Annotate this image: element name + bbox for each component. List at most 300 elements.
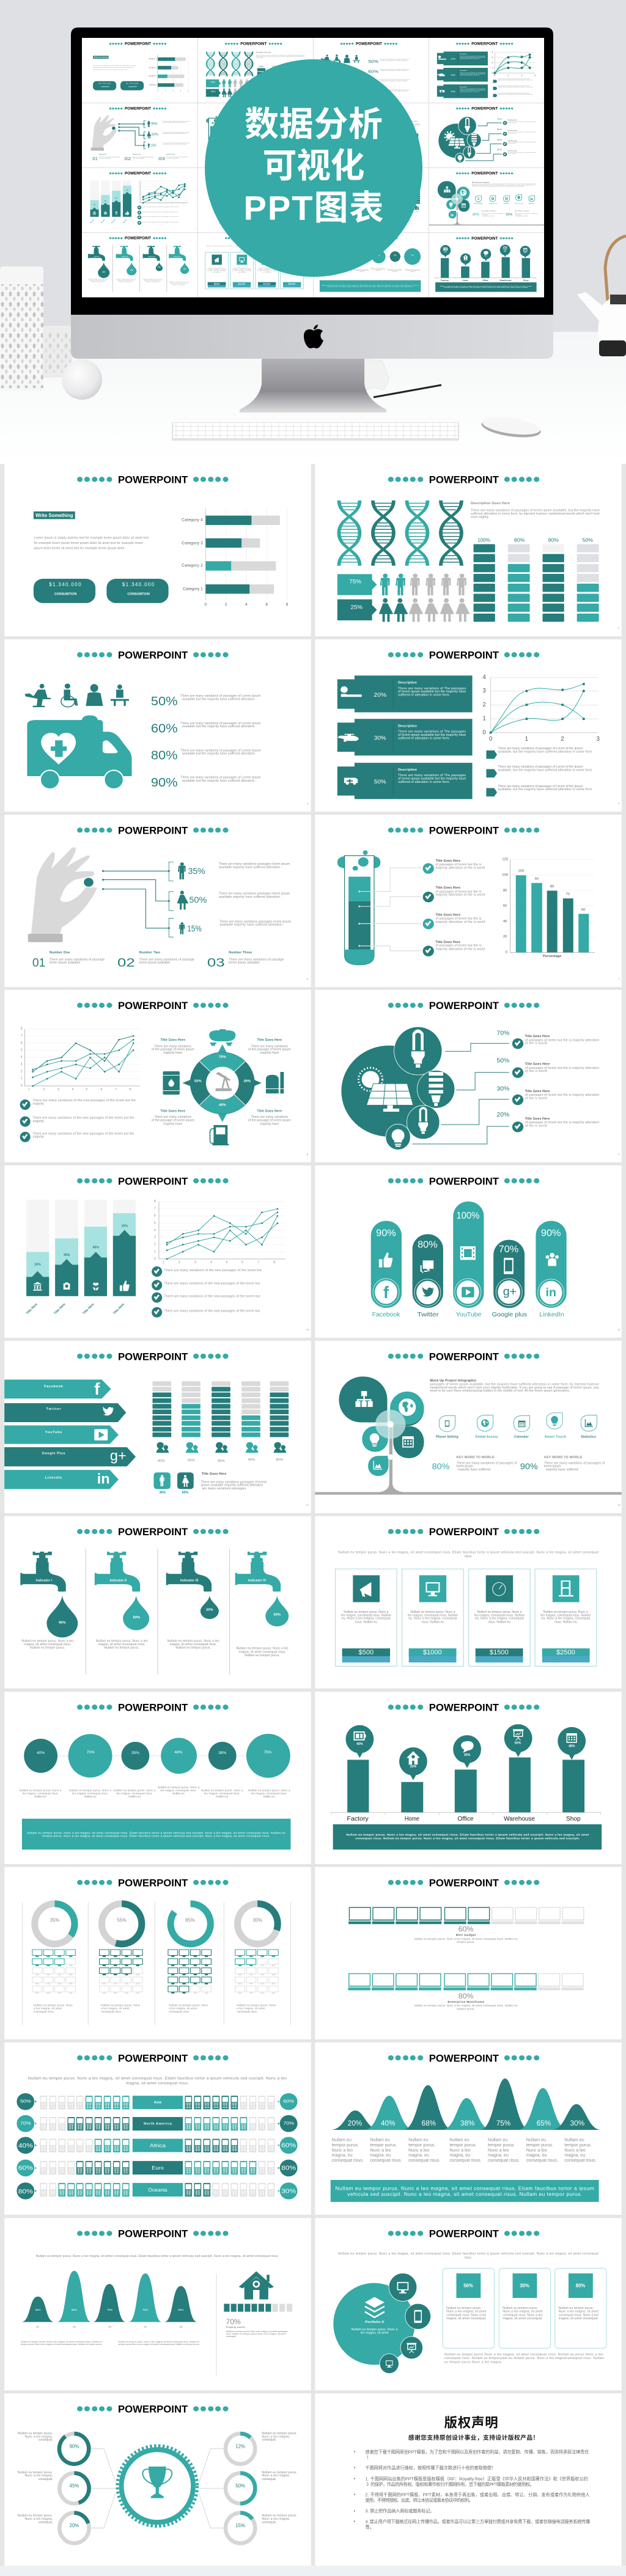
heading: POWERPOINT [429,1351,499,1362]
line chart: 4 [72,1088,73,1092]
bubble captions: leo magna, consequat risus. [117,1792,152,1795]
donut notes: Nullam eu tempor purus. [18,2432,53,2435]
panel: slide 11 social ribbons [4,1341,311,1513]
peak chart: 60% [178,2308,183,2311]
percent list: 60% [151,722,178,735]
hero: iMac desk mockup [0,0,626,464]
line chart: 3 [57,1088,59,1092]
bar chart: 4 [245,603,248,607]
stat card 30: Nunc a leo magna, sit amet [503,2310,543,2314]
price card 1000: eu. Nunc a leo magna, consequat [408,1617,457,1621]
laptop row 60 percent [348,1907,584,1943]
bar chart with pins [331,1724,600,1822]
keyword stats: lorem ipsum [544,1465,561,1469]
peak captions: magna, eu [370,2153,391,2158]
intro text: Lorem Ipsum is simply dummy text for example lorem ipsum dolor sit amet text [34,536,149,540]
mock-up text: need to be sure there embarrassing hidden in the middle of text. All the lorem ipsum generators. [430,1389,570,1393]
price card 2500: $2500 [556,1649,575,1656]
faucet indicator IV: Nullam eu tempor purus. Nunc a leo [237,1647,289,1651]
donut notes [18,2432,297,2524]
faucet indicator II: Nullam eu tempor purus. Nunc a leo [96,1639,148,1643]
check items: majority alteration of the is world [435,866,485,870]
peak chart: 70% [142,2308,148,2311]
stat card 80 [555,2268,606,2348]
connector lines [103,862,174,937]
bubble captions: Nullam eu [34,1795,46,1798]
donut values: 50% [235,2483,245,2489]
keyword stats: 80% [432,1462,449,1471]
line chart: 7 [257,1261,259,1264]
donut notes: Nullam eu tempor purus. [18,2471,53,2475]
facebook ribbon [4,1379,111,1398]
price card 1500: Nullam eu tempor purus. Nunc a [477,1610,522,1614]
youtube pill [453,1202,484,1308]
bullets: • [354,2449,356,2454]
property progress: Nullam eu tempor purus. Nunc a leo magna, sit amet consequat [226,2330,288,2333]
bulb legend: of the is world [525,1042,547,1046]
pencil [374,385,441,397]
bubble captions: Nullam eu [216,1795,228,1798]
bubble timeline: 70% [87,1750,95,1755]
gender split: 65% [182,1491,189,1495]
text banner: Nullam eu tempor purus. Nunc a leo magna, sit amet consequat risus. Etiam faucibus tortor a ipsum [336,2185,594,2191]
gender stats: There are many variations passages lorem ipsum [219,920,291,923]
gender stats: available majority have suffered alteration . [219,895,282,899]
peak captions: tempor purus. [449,2143,477,2148]
check items: Title Goes Here [435,941,460,944]
donut notes: Nunc a leo magna, [262,2517,290,2521]
title: 版权声明 [444,2415,498,2430]
value card 2 [106,579,169,603]
intro text: for example lorem ipsum lorem ipsum dolor sit amet text for example lorem [34,541,143,545]
intro text [338,1550,598,1558]
peak chart: 30% [570,2119,585,2127]
oil captions: There are many variations [154,1044,191,1048]
panel: slide 16 location bars [315,1692,622,1864]
heading [388,1176,539,1187]
panel: slide 7 line chart and oil ring: 8 [307,1153,308,1156]
faucet indicator IV: Nullam eu tempor purus. [245,1654,280,1657]
bubble timeline: 75% [264,1750,272,1755]
heading [77,1351,229,1362]
stat card 56: Nullam eu tempor purus. [446,2306,482,2310]
bulb legend: of passages of lorem but the is majority alteration [525,1121,599,1125]
panel: slide 21 property peaks [4,2218,311,2390]
donut notes: consequat. [262,2478,276,2481]
mini slide 9 [82,167,197,232]
intro text: Nullam eu tempor purus. Nunc a leo magna, sit amet consequat risus. Etiam faucibus tortor a ipsum vehicula sed suscipit. Nunc a leo magna, sit amet consequat [338,1550,598,1554]
bubble captions: leo magna, consequat risus. [161,1789,196,1792]
bar chart with pins: Shop [566,1816,581,1822]
price card 1500: eu. Nunc a leo magna, consequat [475,1617,524,1621]
percent labels: 90% [548,537,559,543]
youtube ribbon: YouTube [45,1431,62,1434]
peak captions: tempor purus. [488,2143,515,2148]
mini slide 4 [429,38,544,103]
curve chart: 1 [482,716,486,722]
chart notes: available, but the majority have suffered alteration in some form. [498,788,593,791]
property progress: risus. Nullam eu tempor purus Nunc a leo magna, sit amet [226,2332,286,2335]
curve chart: 4 [482,674,486,681]
stat card 80: magna, sit amet consequat. [559,2317,598,2321]
bubble timeline: 40% [37,1751,45,1755]
description panel 50 percent: suffered of alteration in some form. [398,780,450,784]
donut values: 12% [235,2444,245,2449]
rotated column titles: Title Here [82,1302,95,1315]
oil captions: Title Goes Here [257,1038,282,1042]
percent list: There are many variations of passages of Lorem Ipsum [180,749,260,752]
numbered notes: There are many variations of passage [50,958,105,961]
peak captions: consequat risus. [449,2158,482,2163]
description panel 30 percent: There are many variations of The passages [398,730,466,734]
row Asia: 60% [283,2099,295,2104]
line chart: 8 [154,1200,156,1203]
captions: consequat risus. [101,2010,122,2013]
text banner: tempor purus. Nunc a leo magna, sit amet consequat risus. Etiam faucibus tortor a ipsum vehicula sed suscipit. Nunc a leo magna, sit amet consequat risus. [42,1835,270,1838]
hero circle badge with title [205,59,422,277]
description panel 50 percent: There are many variations of The passages [398,774,466,777]
intro text: magna, sit amet consequat risus. [126,2081,189,2085]
row Asia: 50% [20,2099,31,2104]
chart notes: available, but the majority have suffered alteration in some form. [498,768,593,772]
heading: POWERPOINT [118,2053,188,2064]
column chart: 60 [503,904,507,908]
connector lines [92,2449,224,2528]
percent labels: 100% [477,537,490,543]
bar chart with pins: 30% [410,1765,416,1769]
column chart: 20 [503,935,507,939]
column chart: 90 [534,878,539,881]
property progress: Property Assets [226,2325,246,2328]
75 percent men row [337,574,466,595]
faucet indicator I [20,1552,78,1650]
panel: slide 20 peaks [315,2042,622,2215]
panel: slide 18 laptops [315,1867,622,2039]
row Oceania [17,2182,298,2200]
heading: POWERPOINT [118,1000,188,1011]
text banner [333,1824,602,1849]
keyword stats: 90% [520,1462,538,1471]
bar chart: Category 3 [182,541,203,545]
bulb legend: Title Goes Here [525,1117,550,1121]
panel: slide 3 ambulance: 4 [307,802,309,805]
heading: POWERPOINT [118,2229,188,2240]
gender split: 35% [160,1491,166,1495]
gray connectors [359,868,421,951]
panel: slide 7 line chart and oil ring [4,990,311,1162]
peak columns: 15% [122,1225,128,1228]
donut values: 35% [50,1918,59,1923]
bubble captions: Nullam eu [263,1795,275,1798]
heading [77,2229,229,2240]
check notes: majority [33,1102,44,1106]
google plus pill: g+ [503,1285,517,1299]
gender split: Title Goes Here [202,1472,226,1476]
donut charts [35,1904,278,1944]
panel: slide 9 stacked columns [4,1165,311,1338]
bullets: 感谢您下载千图网原创PPT模板，为了您和千图网以及原创作者的利益，请勿复制、传播、销售，否则将承担法律责任 [366,2449,589,2454]
faucet indicator IV [235,1552,289,1657]
bubble captions: leo magna, consequat risus. [204,1792,240,1795]
captions: Nullam eu tempor purus. Nunc [237,2004,276,2007]
faucet indicator IV: Indicator IV [248,1579,267,1583]
gender split: There are many variations passages of lorem [201,1480,267,1484]
peak columns: 15% [34,1263,41,1267]
donut values: 45% [70,2483,79,2489]
numbered notes: lorem ipsum available [229,961,260,965]
bulb legend: Title Goes Here [525,1063,550,1066]
faucet indicator III: 20% [206,1609,214,1612]
linkedin ribbon: in [97,1471,110,1487]
oil captions: of the passage of lorem ipsum [248,1048,291,1052]
25 percent women row [337,598,470,622]
numbered notes: lorem ipsum available [139,961,170,965]
heading: POWERPOINT [118,1176,188,1187]
heading [388,650,539,661]
percent labels [477,537,594,543]
laptop row 60 percent: Mini Gadget [456,1933,476,1937]
text banner: Nullam eu tempor purus. Nunc a leo magna, sit amet consequat risus. Etiam faucibus tortor a ipsum vehicula sed suscipit. Nunc a leo magna, sit amet consequat risus. Nullam eu [27,1831,285,1835]
circle cluster [341,1027,455,1150]
line chart: 5 [154,1221,156,1225]
captions: a leo magna, sit amet [237,2007,265,2010]
check items: majority alteration of the is world [435,920,485,924]
peak captions: tempor purus. [408,2143,435,2148]
faucet indicator III [166,1552,219,1650]
stat card 56: Nunc a leo magna, sit amet [446,2310,487,2314]
oil ring diagram: 40% [219,1103,226,1107]
line chart: 3 [154,1236,156,1239]
bar chart: 6 [265,603,268,607]
row Euro: Euro [152,2165,164,2171]
row North America [17,2115,298,2132]
line chart: 6 [241,1261,243,1264]
intro text: risus. [465,2256,472,2260]
price card 1000: risus. Nullam eu [422,1620,444,1624]
percent labels: 80% [514,537,525,543]
heading [77,2053,229,2064]
feature icons: Smart Touch [545,1436,566,1439]
price card 1000: $1000 [423,1649,442,1656]
oil ring diagram: 30% [243,1079,251,1083]
gear with trophy [117,2446,197,2526]
white perforated vase [0,266,43,391]
value card 1: $1.340.000 [49,582,81,587]
heading: POWERPOINT [118,1702,188,1713]
heading [77,475,229,486]
description panel 30 percent: Description [398,724,417,728]
peak chart: 20 [180,2325,183,2328]
price card 500: leo magna, consequat risus. Nullam [341,1613,391,1617]
footer strip [0,2566,626,2576]
value card 2: $1.340.000 [122,582,155,587]
panel: slide 9 stacked columns: 10 [306,1328,309,1331]
laptop row 60 percent: 60% [458,1926,474,1934]
bar chart with pins: 45% [356,1742,363,1746]
panel: slide 22 portfolio [315,2218,622,2390]
bar chart with pins: Warehouse [504,1816,535,1822]
faucet indicator III: magna, sit amet consequat risus. [170,1643,217,1646]
curve chart: 1 [525,736,528,743]
faucet indicator I: 90% [59,1621,67,1625]
row Africa: Africa [150,2143,166,2149]
slide rows 2 [4,815,622,1162]
linkedin ribbon: LinkedIn [45,1476,62,1480]
facebook ribbon: Facebook [44,1385,64,1389]
price card 2500: risus. Nullam eu [554,1620,577,1624]
portfolio circle [333,2273,431,2374]
column chart: 40 [503,920,507,923]
note text: eu tempor purus Nunc a leo magna. [444,2361,503,2365]
gender stats: 35% [188,867,205,876]
panel: slide 23 trophy gear [4,2393,311,2566]
faucet indicator II: Indicator II [110,1579,127,1583]
heading [388,1877,539,1888]
bullets: 千图网将对作品进行维权，按照传播下载次数进行十倍的索取赔偿！ [366,2465,496,2470]
social labels [372,1312,564,1318]
line chart: 6 [154,1214,156,1218]
heading: POWERPOINT [429,1176,499,1187]
value card 2: CONSUMTION [127,593,150,596]
intro text: Nullam eu tempor purus. Nunc a leo magna, sit amet consequat risus. Etiam faucibus tortor a ipsum vehicula sed suscipit. Nunc a leo [28,2077,287,2081]
gender stats: available majority have suffered alteration [219,923,282,927]
peak captions: Nunc a leo [370,2148,391,2152]
heading: POWERPOINT [429,1527,499,1538]
hand illustration [28,847,97,942]
price card 1500: risus. Nullam eu [488,1620,510,1624]
bullets: 等。 [366,2525,374,2530]
price card 500 [336,1569,397,1666]
keyword stats: majority have suffered [546,1468,578,1472]
bulb legend: of the is world [525,1070,547,1073]
gender stats: 50% [190,895,207,905]
bubble captions: Nullam eu tempor purus. Nunc a [158,1786,200,1789]
percent list: available but the majority have suffered alteration. [182,725,256,728]
panel: slide 2 DNA: 3 [617,626,619,629]
chart notes: available, but the majority have suffered alteration in some form. [498,750,593,754]
panel: slide 3 ambulance [4,639,311,812]
heading: POWERPOINT [429,2229,499,2240]
donut notes: consequat. [39,2520,53,2524]
gender stats: There are many variations passages lorem ipsum [219,892,290,895]
bubble captions: leo magna, consequat risus. [23,1792,58,1795]
bubble captions: Nullam eu tempor purus. Nunc a [201,1789,243,1792]
captions: a leo magna, sit amet [101,2007,130,2010]
google plus pill: 70% [499,1244,518,1255]
row Oceania: 80% [18,2189,33,2195]
peak captions: consequat risus. [370,2158,402,2163]
line chart: 4 [154,1228,156,1232]
panel: slide 10 social pills [315,1165,622,1338]
social labels: Facebook [372,1312,400,1318]
peak captions: Nullam eu [408,2137,428,2142]
peak captions: tempor purus. [526,2143,553,2148]
text banner: vehicula sed suscipit. Nunc a leo magna, sit amet consequat risus. Nullam eu tempor purus. [347,2191,582,2197]
facebook pill [371,1221,402,1308]
peak captions: Nunc a leo [488,2148,509,2152]
check notes: There are many variations of the new passages of the lorem but [164,1282,260,1286]
note text [444,2353,605,2365]
check notes: There are many variations of the new passages of the lorem but the [33,1099,136,1103]
bulb legend: Title Goes Here [525,1035,550,1038]
description: There are many variations of passages of lorem ipsum available, but the majority have [471,509,600,513]
donut values: 90% [70,2444,79,2449]
peak captions: Nunc a leo [526,2148,547,2152]
percent list: 80% [151,749,178,763]
value card 1: CONSUMTION [54,593,77,596]
check notes: There are many variations of the new passages of the lorem but [164,1309,260,1313]
youtube pill: 100% [456,1211,479,1221]
intro text: risus. [465,1555,472,1558]
left donuts [59,2434,89,2543]
facebook pill: 90% [376,1228,396,1238]
slide rows 1 [4,464,622,812]
price card 2500: leo magna, consequat risus. Nullam [540,1613,591,1617]
donut notes: consequat. [39,2478,53,2481]
percent list: available but the majority have suffered alteration. [182,779,256,783]
facebook ribbon: f [94,1379,100,1398]
check items: of passages of lorem but the is [435,944,482,948]
donut values: 55% [117,1918,127,1923]
donut values [50,1918,262,1923]
oil captions: There are many variations [251,1044,289,1048]
peak captions: magna, eu [526,2153,547,2158]
oil captions: of the passage of lorem ipsum [152,1048,194,1052]
heading [388,825,539,836]
title line 3: PPT图表 [243,188,384,227]
description panel 30 percent: suffered of alteration in some form. [398,736,450,740]
people icons and values: 80% [158,1459,165,1463]
intro text: Nullam eu tempor purus. Nunc a leo magna, sit amet consequat risus. Etiam faucibus tortor a ipsum vehicula sed suscipit. Nunc a leo magna, sit amet consequat risus. [36,2255,279,2258]
bullets: ！ [367,2455,371,2460]
intro text [34,536,149,550]
description: suffered alteration in some form, by injected humour randomized words which don't look [471,512,600,516]
value card 1 [34,579,95,603]
peak captions: magna, eu [408,2153,429,2158]
description panel 50 percent: of lorem ipsum available but the majority have [398,777,466,781]
text banner: consequat risus. Nullam eu tempor purus. Nunc a leo magna, sit amet consequat risus. Etiam faucibus tortor a ipsum vehicula sed suscipit. [355,1837,580,1840]
line chart: 8 [21,1027,23,1031]
peak captions: tempor purus. [332,2143,359,2148]
monitor stand [240,359,386,413]
bullets: • [354,2465,356,2470]
line chart: 0 [154,1257,156,1261]
donut notes: consequat. [262,2438,276,2442]
heading: POWERPOINT [429,825,499,836]
donut notes: Nullam eu tempor purus. [18,2514,53,2518]
panel: slide 1 bar chart [4,464,311,636]
column chart [502,858,595,958]
peak captions: Nullam eu [449,2137,470,2142]
heading [388,475,539,486]
twitter ribbon: Twitter [46,1407,61,1411]
line chart: 5 [21,1048,23,1052]
oil icons [163,1029,284,1145]
row Oceania: Oceania [148,2187,168,2193]
line chart: 3 [194,1261,196,1264]
check notes [20,1099,136,1142]
mock-up text: passages of lorem ipsum available, but the majority have suffered alteration in some form, by injected humour [430,1382,599,1386]
check notes: There are many variations of the new passages of the lorem but the [33,1132,134,1136]
check items: Title Goes Here [435,886,460,890]
description panel 50 percent: 50% [374,779,386,785]
check items: Title Goes Here [435,859,460,863]
percent list: available but the majority have suffered alteration. [182,752,256,756]
peak columns: 35% [64,1253,70,1257]
DNA helix icons [339,501,462,566]
linkedin pill [536,1221,567,1308]
bulb legend: 70% [496,1030,510,1037]
